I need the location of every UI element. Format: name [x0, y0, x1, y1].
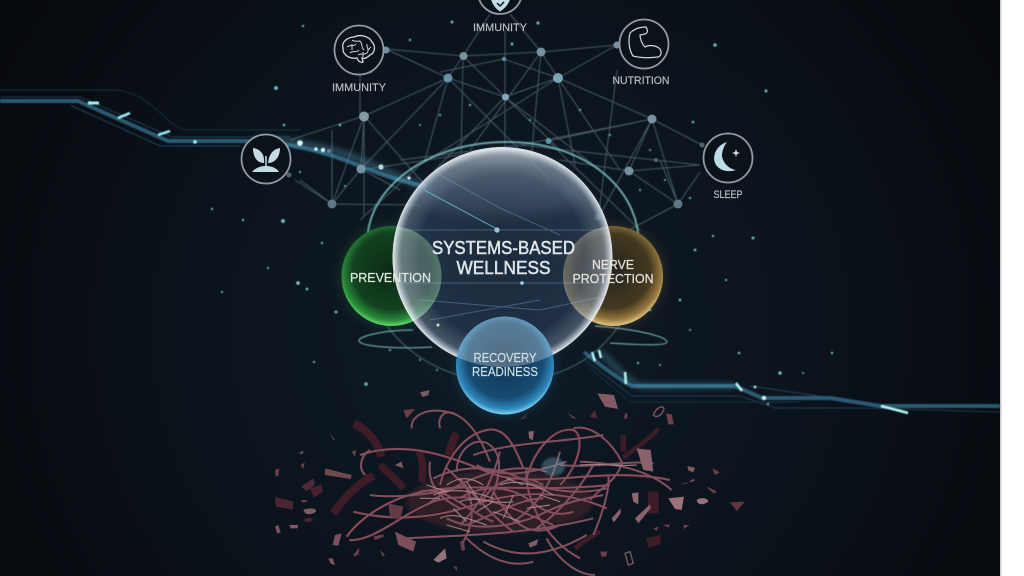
network nodes [286, 42, 704, 220]
label: nutrition: NUTRITION [612, 75, 670, 87]
label: immunity top: IMMUNITY [473, 22, 528, 34]
label: nerve protection [572, 257, 654, 286]
tangled broken strands [275, 390, 745, 575]
tangle core highlights [420, 465, 637, 532]
circle: prevention [342, 226, 442, 326]
strand loops [347, 411, 672, 575]
left data stream [0, 90, 430, 190]
label: recovery readiness [472, 350, 538, 379]
network mesh [286, 14, 704, 240]
icon: muscle [620, 20, 668, 68]
network lines [290, 14, 702, 240]
thick dark bands [333, 423, 658, 548]
label: recovery readiness: READINESS [472, 364, 538, 379]
circle: recovery readiness [456, 316, 554, 414]
center title [432, 238, 575, 278]
center title: SYSTEMS-BASED [432, 238, 575, 258]
outer orbit rings [359, 142, 667, 381]
strand undercoat [347, 430, 670, 540]
icon: moon [704, 134, 752, 182]
icon: plant [242, 134, 290, 184]
label: sleep: SLEEP [714, 189, 742, 201]
label: immunity left: IMMUNITY [332, 82, 387, 94]
tangle core mass [407, 470, 593, 533]
scattered particles [211, 20, 833, 405]
main sphere [392, 147, 612, 358]
right data stream [584, 350, 1000, 413]
label: nerve protection: NERVE [592, 257, 634, 272]
circle: nerve protection [563, 226, 663, 326]
flying shards [275, 390, 745, 571]
label: prevention: PREVENTION [350, 270, 431, 285]
label: nerve protection: PROTECTION [572, 271, 654, 286]
right white margin [1000, 0, 1024, 576]
icon: brain [334, 26, 384, 74]
icon: shield top [478, 0, 522, 14]
label: recovery readiness: RECOVERY [474, 350, 537, 365]
glow behind spheres [342, 149, 663, 415]
center title: WELLNESS [456, 258, 550, 278]
